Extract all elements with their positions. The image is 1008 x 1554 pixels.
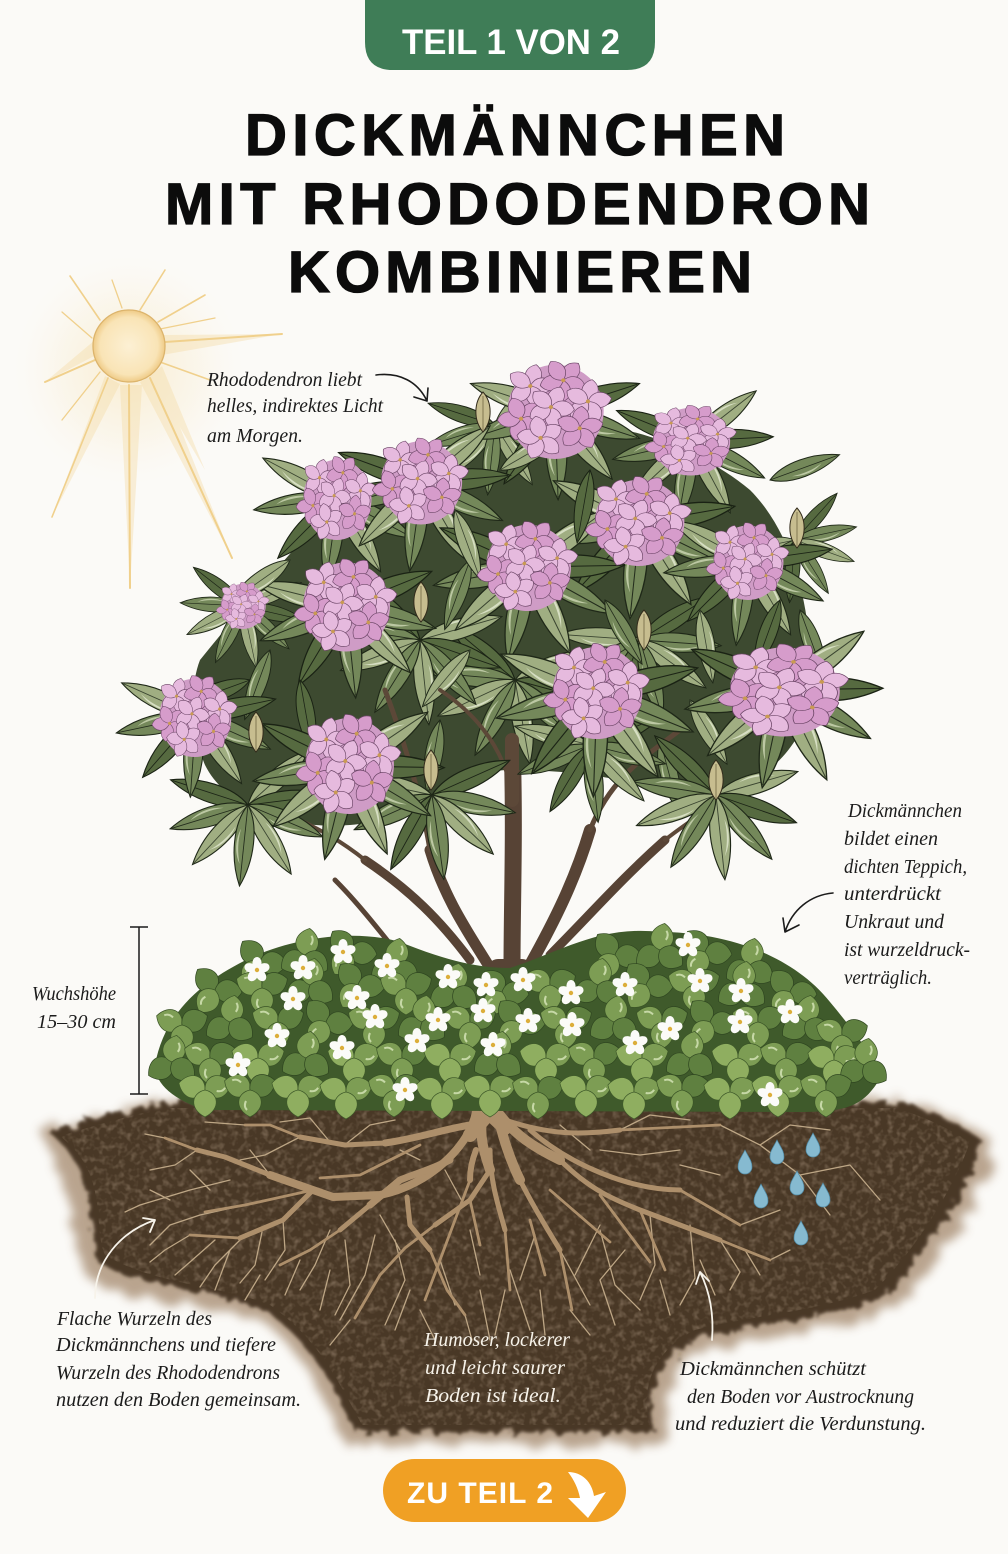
note: shared soil: Dickmännchens und tiefere xyxy=(55,1334,276,1356)
measure: growth height: 15–30 cm xyxy=(37,1011,116,1033)
icon: sun xyxy=(14,255,282,588)
note: shared soil: nutzen den Boden gemeinsam. xyxy=(56,1389,301,1411)
note: dense carpet: Unkraut und xyxy=(844,911,945,933)
title: KOMBINIEREN xyxy=(288,240,752,305)
note: morning light: am Morgen. xyxy=(207,425,303,447)
main roots xyxy=(270,1112,560,1205)
branches through the canopy xyxy=(300,690,730,860)
white flowers xyxy=(224,932,804,1108)
panel: groundcover xyxy=(143,921,893,1119)
back leaf rosettes xyxy=(172,369,880,778)
button: to part 2: ZU TEIL 2 xyxy=(407,1477,553,1510)
note: shared soil xyxy=(55,1308,301,1411)
arrow: carpet note to groundcover xyxy=(783,893,833,932)
rhododendron trunk and limbs xyxy=(335,740,665,970)
note: dense carpet: verträglich. xyxy=(844,967,932,989)
scattered single leaves xyxy=(178,426,842,814)
note: dense carpet: bildet einen xyxy=(844,828,938,850)
note: dense carpet: ist wurzeldruck- xyxy=(844,939,970,961)
measure: growth height xyxy=(32,927,148,1094)
title: DICKMÄNNCHEN xyxy=(245,103,785,168)
note: ideal soil: Boden ist ideal. xyxy=(425,1385,561,1407)
note: ideal soil: Humoser, lockerer xyxy=(423,1329,570,1351)
leaves xyxy=(143,921,893,1119)
flower clusters xyxy=(144,348,855,824)
panel: rhododendron canopy xyxy=(108,348,893,901)
note: morning light xyxy=(206,369,383,447)
note: dense carpet: Dickmännchen xyxy=(847,800,962,822)
measure: growth height: Wuchshöhe xyxy=(32,983,116,1005)
title xyxy=(165,103,870,305)
badge: part 1 of 2 xyxy=(365,0,655,70)
badge: part 1 of 2: TEIL 1 VON 2 xyxy=(402,23,620,62)
fine rootlets xyxy=(125,1115,880,1345)
note: dense carpet xyxy=(844,800,970,989)
note: moisture: Dickmännchen schützt xyxy=(679,1358,866,1380)
note: moisture: und reduziert die Verdunstung. xyxy=(675,1413,926,1435)
roots xyxy=(125,1112,880,1345)
title: MIT RHODODENDRON xyxy=(165,172,870,237)
front leaf rosettes xyxy=(108,620,893,901)
note: ideal soil: und leicht saurer xyxy=(425,1357,565,1379)
note: morning light: Rhododendron liebt xyxy=(206,369,362,391)
icon: water drops xyxy=(738,1133,830,1245)
note: shared soil: Wurzeln des Rhododendrons xyxy=(56,1362,280,1384)
arrow: moisture note xyxy=(696,1272,712,1340)
note: moisture: den Boden vor Austrocknung xyxy=(687,1386,914,1408)
arrow: roots note xyxy=(95,1218,155,1298)
note: dense carpet: unterdrückt xyxy=(844,883,941,905)
panel: soil xyxy=(38,1100,992,1444)
button: to part 2 xyxy=(383,1459,626,1522)
flower buds xyxy=(249,392,804,800)
note: moisture xyxy=(675,1358,926,1435)
note: morning light: helles, indirektes Licht xyxy=(207,395,383,417)
note: dense carpet: dichten Teppich, xyxy=(844,856,967,878)
icon: curved arrow xyxy=(568,1472,606,1518)
medium roots xyxy=(197,1120,720,1250)
thin roots xyxy=(165,1125,770,1318)
arrow: light note to shrub xyxy=(376,374,428,401)
note: ideal soil xyxy=(423,1329,570,1407)
note: shared soil: Flache Wurzeln des xyxy=(56,1308,212,1330)
